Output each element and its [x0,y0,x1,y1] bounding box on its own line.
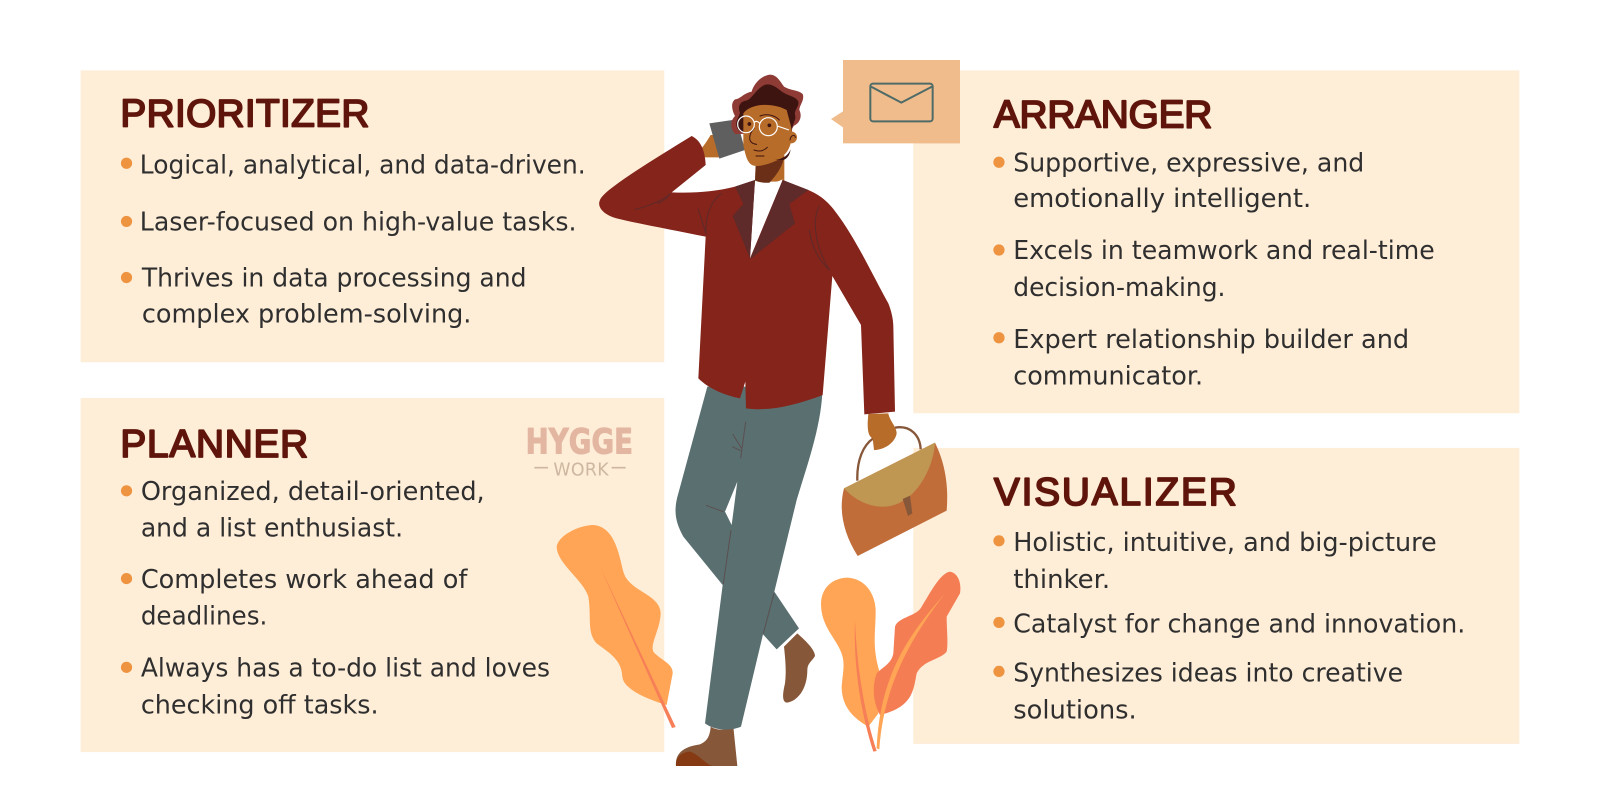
bullet: logical: Logical, analytical, and data-driven. [140,150,586,180]
logo: hygge work: HYGGE [526,423,633,463]
person: man on phone carrying a bag [599,75,947,766]
head with hair, glasses and phone [709,75,803,166]
bullet: catalyst: Catalyst for change and innovation. [1013,610,1465,640]
bullet: expert [993,325,1409,392]
bullet: organized: and a list enthusiast. [141,514,403,544]
icon: envelope [870,84,933,121]
heading: planner: PLANNER [120,423,308,466]
bullet: organized [121,477,485,544]
bullet: synthesizes [993,659,1403,725]
leaf: middle orange [821,578,880,752]
bullet: synthesizes: Synthesizes ideas into creative [1013,659,1403,689]
panel: planner [81,398,664,752]
bullet: organized: Organized, detail-oriented, [141,477,485,507]
panel: visualizer [913,448,1519,744]
bullet: always: Always has a to-do list and loves [141,654,550,684]
neck and hand [700,135,784,184]
callout: speech bubble with envelope [831,60,960,143]
bullet: thrives: complex problem-solving. [142,299,471,329]
heading: prioritizer: PRIORITIZER [120,93,369,136]
bullet: expert: communicator. [1013,362,1203,392]
heading: arranger: ARRANGER [994,94,1212,137]
hand and bag [842,413,947,556]
bullet: completes: Completes work ahead of [141,565,468,595]
logo: hygge work: WORK [553,461,609,481]
bullet: always [121,654,550,720]
bullet: thrives: Thrives in data processing and [141,264,527,294]
bullet: synthesizes: solutions. [1013,695,1137,725]
jacket [599,136,895,414]
panel: arranger [913,70,1519,413]
bullet: supportive: Supportive, expressive, and [1013,148,1364,178]
bullet: thrives [121,264,527,329]
heading: visualizer: VISUALIZER [994,471,1237,514]
bullet: holistic: thinker. [1013,565,1110,595]
bullet: completes: deadlines. [141,601,267,631]
bullet: excels: decision-making. [1013,273,1226,303]
bullet: supportive: emotionally intelligent. [1013,184,1311,214]
bullet: laser-focused: Laser-focused on high-value tasks. [140,208,577,238]
bullet: completes [121,565,468,631]
bullet: excels: Excels in teamwork and real-time [1013,236,1435,266]
leaf: left orange [557,525,676,728]
leaf: right coral [874,572,960,749]
bullet: always: checking off tasks. [141,690,379,720]
bullet: holistic: Holistic, intuitive, and big-picture [1013,528,1437,558]
bullet: holistic [993,528,1437,595]
bullet: expert: Expert relationship builder and [1013,325,1409,355]
bullet: supportive [993,148,1364,214]
logo: hygge work [526,423,633,481]
panel: prioritizer [81,70,664,362]
legs and shoes [676,387,823,766]
bullet: excels [993,236,1435,303]
